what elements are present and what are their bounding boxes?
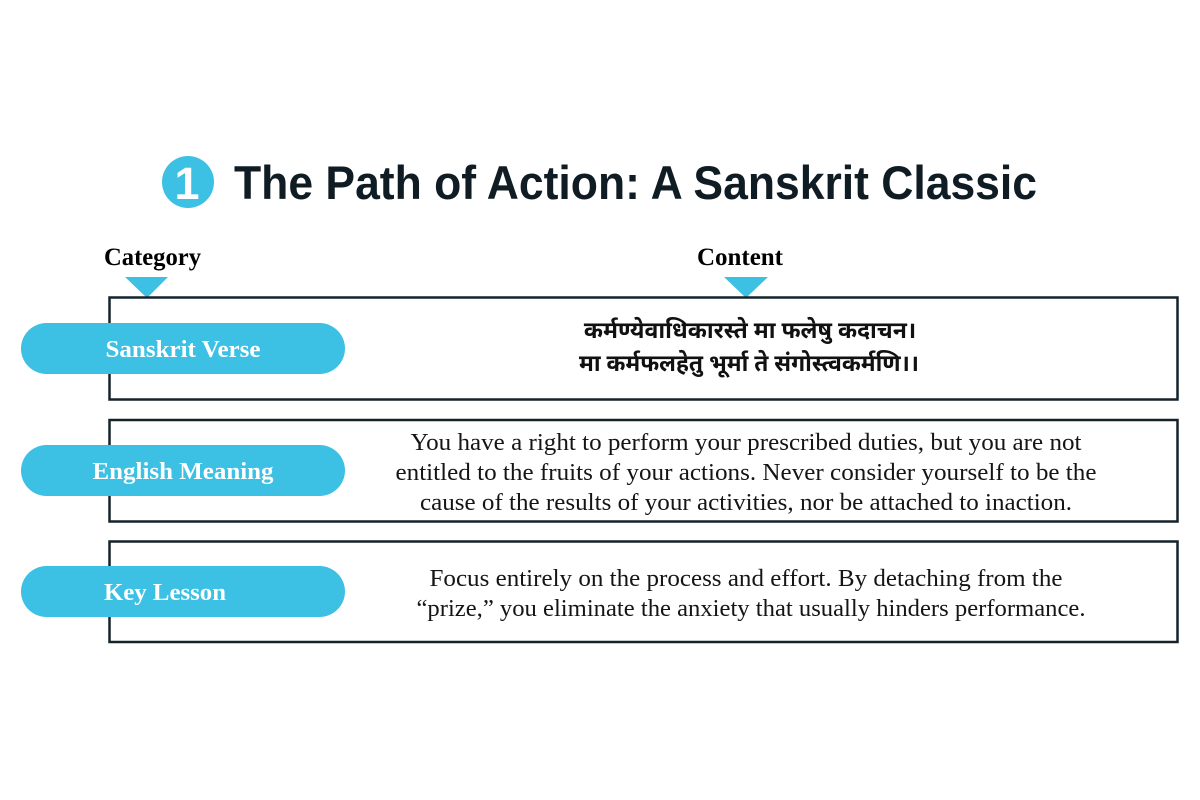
category pill: sanskrit verse xyxy=(21,323,345,374)
column heading: content: Content xyxy=(697,244,784,271)
meaning text: cause of the results of your activities, nor be attached to inaction. xyxy=(420,489,1072,516)
lesson text xyxy=(416,565,1086,622)
title text: The Path of Action: A Sanskrit Classic xyxy=(234,156,1037,209)
lesson text: Focus entirely on the process and effort. By detaching from the xyxy=(430,565,1063,592)
icon: number one badge xyxy=(162,156,214,209)
category pill: key lesson: Key Lesson xyxy=(104,580,226,606)
meaning text: You have a right to perform your prescribed duties, but you are not xyxy=(410,429,1082,456)
column heading: category: Category xyxy=(104,244,201,271)
verse text xyxy=(579,317,919,381)
title xyxy=(162,156,1037,209)
verse text: मा कर्मफलहेतु भूर्मा ते संगोस्त्वकर्मणि।। xyxy=(579,350,919,381)
meaning text xyxy=(396,429,1097,516)
verse text: कर्मण्येवाधिकारस्ते मा फलेषु कदाचन। xyxy=(584,317,916,348)
category pill: english meaning xyxy=(21,445,345,496)
panel: sanskrit verse xyxy=(21,298,1178,400)
category pill: english meaning: English Meaning xyxy=(92,459,274,485)
column heading: content xyxy=(697,244,784,298)
category pill: key lesson xyxy=(21,566,345,617)
panel: key lesson xyxy=(21,542,1178,642)
column heading: category xyxy=(104,244,201,298)
category pill: sanskrit verse: Sanskrit Verse xyxy=(106,337,261,363)
icon: number one badge: 1 xyxy=(174,158,200,209)
meaning text: entitled to the fruits of your actions. Never consider yourself to be the xyxy=(396,459,1097,486)
lesson text: “prize,” you eliminate the anxiety that usually hinders performance. xyxy=(416,595,1086,622)
panel: english meaning xyxy=(21,420,1178,522)
